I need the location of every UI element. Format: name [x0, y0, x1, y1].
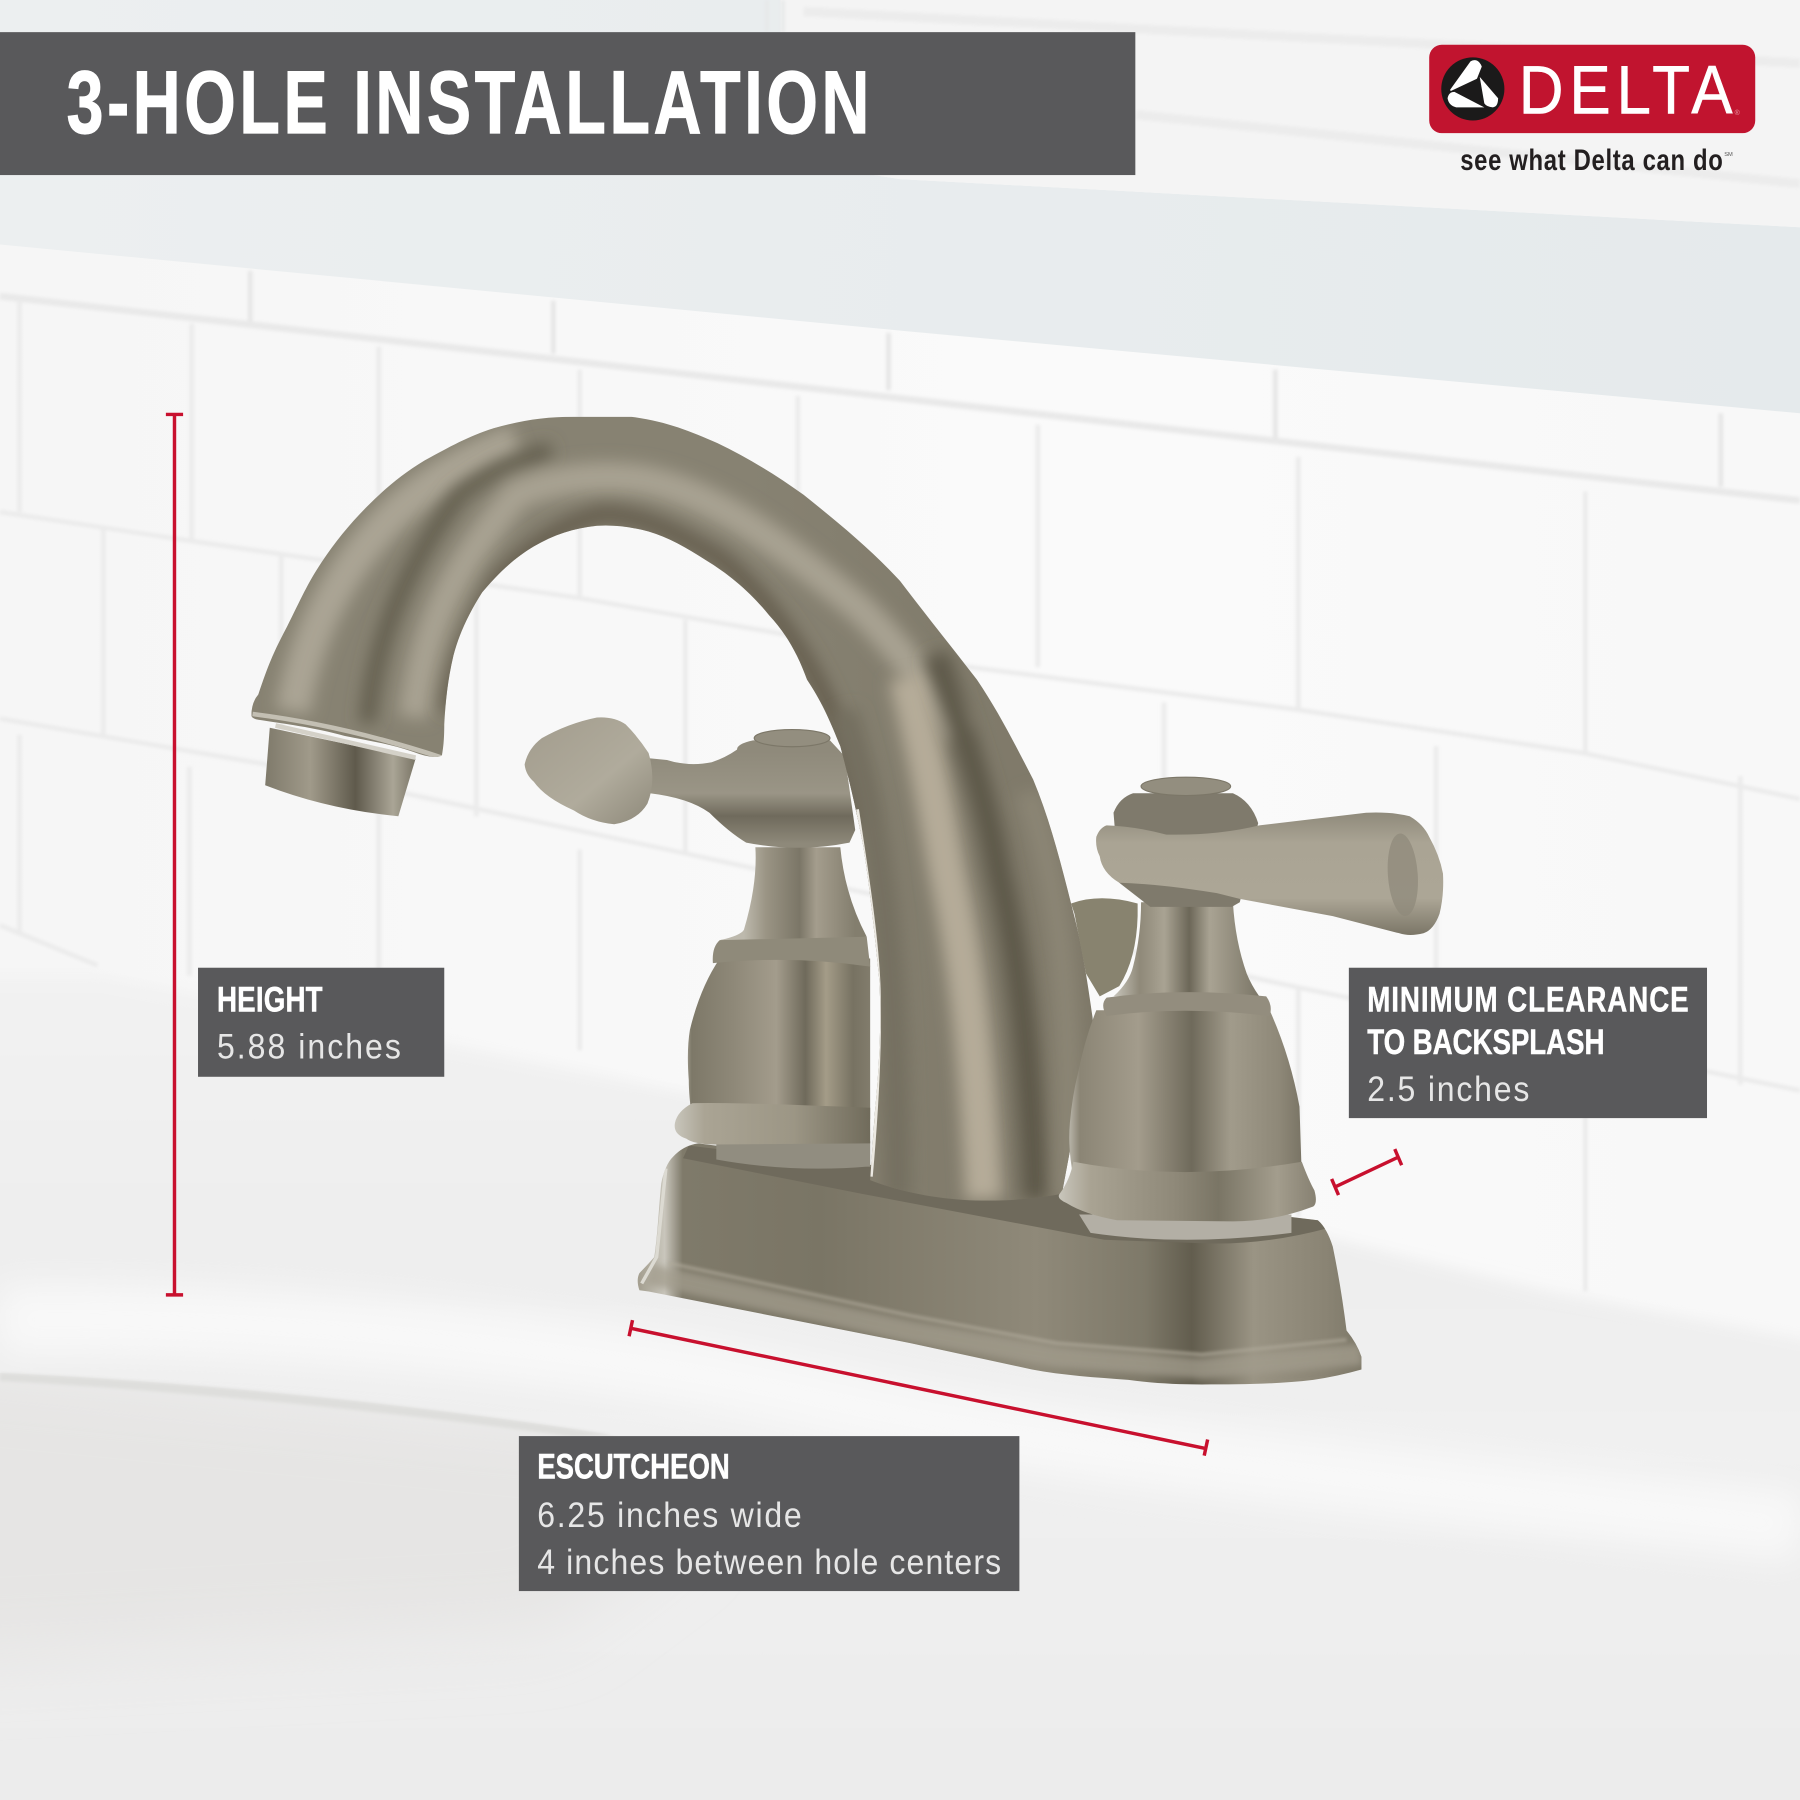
Delta logo: ® [1735, 109, 1740, 117]
Delta logo [1429, 45, 1755, 177]
left handle hub and arm [634, 740, 855, 848]
right handle gasket [1079, 1215, 1291, 1240]
left handle lever [525, 717, 652, 824]
callout heading: escutcheon: ESCUTCHEON [537, 1446, 730, 1486]
spout [252, 416, 1093, 1200]
callout value: clearance: 2.5 inches [1367, 1069, 1529, 1109]
callout value: height: 5.88 inches [217, 1027, 401, 1067]
column edge highlight [858, 809, 880, 1177]
faucet [230, 390, 1443, 1401]
callout: height [198, 968, 444, 1077]
callout: minimum clearance [1349, 968, 1707, 1118]
base plate [638, 1144, 1362, 1384]
tagline: see what Delta can do [1460, 143, 1723, 177]
column light band [907, 677, 984, 1200]
callout heading line 2: TO BACKSPLASH [1367, 1021, 1605, 1062]
left handle collar [713, 934, 870, 967]
column dark band [936, 654, 1035, 1200]
right handle neck [1114, 902, 1259, 996]
right handle hub [1114, 793, 1258, 907]
aerator [265, 726, 416, 816]
left handle [525, 717, 870, 1145]
icon: Delta triangle emblem [1441, 57, 1504, 121]
title: 3-HOLE INSTALLATION [67, 52, 869, 152]
right handle [1059, 777, 1443, 1221]
spout inner highlight [413, 477, 959, 735]
dimension line: backsplash clearance [1332, 1149, 1402, 1195]
spout lip highlight [253, 714, 442, 758]
dimension line: height [166, 414, 183, 1295]
right handle collar [1103, 992, 1271, 1016]
callout heading: height: HEIGHT [217, 979, 323, 1019]
left handle cap [754, 730, 830, 747]
right handle cap [1141, 777, 1231, 796]
spout outer highlight [293, 442, 517, 712]
dimension line: escutcheon width [629, 1320, 1208, 1456]
left handle gasket [716, 1141, 870, 1169]
title banner [0, 32, 1135, 175]
right handle foot [1059, 1162, 1316, 1221]
callout heading: minimum clearance: MINIMUM CLEARANCE [1367, 979, 1689, 1019]
callout value: width: 6.25 inches wide [537, 1495, 802, 1535]
right handle lever [1096, 813, 1443, 935]
left handle bell [688, 959, 870, 1119]
logo badge [1429, 45, 1755, 133]
pop-up rod [1071, 898, 1138, 996]
Delta logo: SM [1724, 152, 1733, 158]
spout crease shadow [367, 450, 551, 723]
callout value: hole centers: 4 inches between hole centers [537, 1542, 1001, 1582]
logo wordmark: DELTA [1519, 52, 1733, 128]
right handle bell [1069, 1010, 1302, 1177]
left handle neck [720, 847, 867, 940]
lever end detail [1385, 832, 1421, 917]
column far-side tone [1027, 792, 1069, 1200]
column left shadow [844, 712, 898, 1200]
left handle foot [675, 1103, 870, 1145]
spout underside shadow [450, 514, 863, 827]
callout: escutcheon [519, 1436, 1019, 1591]
